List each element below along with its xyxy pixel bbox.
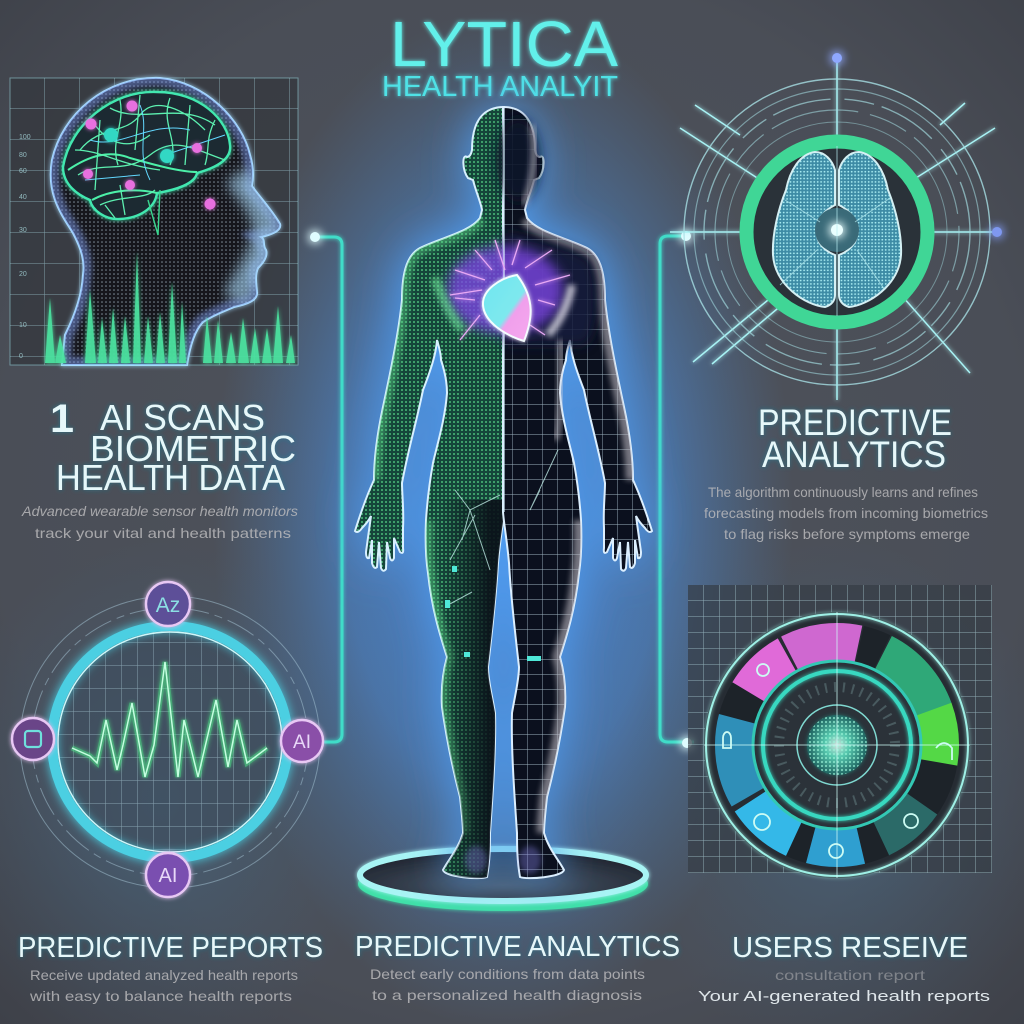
text block: center analytics [355,931,680,1003]
abdominal lines [448,450,558,605]
panel backdrop [10,78,298,365]
monitor fill [54,628,286,856]
axis labels: 100 [19,134,31,141]
center ball [807,715,867,775]
text block: step 1: HEALTH DATA [56,457,285,498]
text block: step 1: track your vital and health patterns [35,525,291,541]
center line [503,108,505,512]
side glow: lower left [0,540,380,1024]
brain [63,92,230,219]
grid [10,78,298,365]
axis labels: 10 [19,322,27,329]
text block: predictive analytics: ANALYTICS [762,434,946,475]
ring fill [747,142,927,322]
ring [52,626,288,858]
green waveform spikes [45,252,295,363]
node: top [146,582,190,626]
inner thin ring [797,705,877,785]
grid backdrop [688,585,992,873]
left leg inner shadow [440,500,505,880]
connector: right [660,231,694,748]
feet highlights [465,846,541,874]
human figure [355,107,652,880]
title [382,8,618,103]
node: top: Az [156,594,180,617]
description: Advanced wearable sensor health monitors [21,503,298,519]
axis labels: 80 [19,152,27,159]
platform underglow [358,857,648,911]
panel: brain scan [10,78,298,365]
cyan nodes [104,128,174,163]
text block: predictive reports [18,932,323,1004]
description: Detect early conditions from data points [370,966,645,982]
central blue glow [213,10,793,1024]
node: bottom: AI [159,865,177,887]
center glow [831,224,843,236]
knee glints [445,566,541,661]
description: consultation report [775,967,925,983]
panel: ECG monitor [12,582,323,897]
side glow: lower right [620,540,1024,1024]
face shading [496,118,540,202]
brain network lines [75,95,225,218]
right torso silver highlight [556,340,561,440]
pink nodes [83,100,216,210]
left half: green mesh [355,107,504,878]
node: left [12,718,54,760]
heart rays [450,240,570,340]
segment icons [723,664,952,858]
heading: AI SCANS [100,397,265,438]
left lung [773,152,835,307]
lobe divider lines [780,146,890,316]
text block: users receive: Your AI-generated health reports [698,988,990,1005]
text block: center analytics: to a personalized health diagnosis [372,987,642,1003]
step number: 1 [50,397,74,441]
upper right torso shading [504,232,597,345]
text block: predictive analytics: forecasting models from incoming biometrics [704,505,988,521]
right lung [839,152,901,307]
left chest highlight [435,278,462,330]
top beacon [832,53,842,63]
subtitle: HEALTH ANALYIT [382,71,618,103]
heading: USERS RESEIVE [732,932,968,964]
outer rim [706,614,968,876]
heading: PREDICTIVE [758,402,952,443]
panel: report dial [688,585,992,888]
description: The algorithm continuously learns and refines [708,484,978,500]
outer halo rings [20,596,320,888]
axis labels: 20 [19,271,27,278]
text block: predictive analytics [704,402,988,542]
text block: predictive reports: with easy to balance health reports [29,988,292,1004]
dial base [704,612,970,878]
heading: PREDICTIVE PEPORTS [18,932,323,964]
segments [694,602,980,888]
axis labels: 60 [19,168,27,175]
node: right [281,720,323,762]
axis labels: 40 [19,194,27,201]
axis labels: 30 [19,227,27,234]
right chest highlight [548,285,572,335]
right beacon [992,227,1002,237]
crosshair [704,612,970,878]
connector: left [310,232,342,742]
head rim and face light [51,78,280,365]
text block: step 1 [21,397,298,541]
inner dashes [779,687,895,803]
heart [483,275,531,341]
waveform [72,662,267,777]
grid [57,631,282,852]
text block: users receive [698,932,990,1005]
brain stem [148,190,160,235]
axis labels [19,134,31,360]
green ring [746,142,928,322]
right half: dark grid [503,107,652,878]
figure far glow [355,107,652,878]
text block: step 1: BIOMETRIC [90,428,296,469]
head profile [51,78,280,365]
platform disc [360,849,646,901]
head dot texture [51,78,280,365]
outer rings [684,79,990,385]
inner dial [753,661,921,829]
heading: PREDICTIVE ANALYTICS [355,931,680,963]
left outer green light [374,218,480,833]
face side light [524,125,534,205]
waveform glow [72,662,267,777]
description: Receive updated analyzed health reports [30,967,298,983]
chest purple glow [447,246,563,334]
panel: lungs scanner [670,53,1002,400]
inner ring [763,671,911,819]
axis labels: 0 [19,353,23,360]
brain cyan lines [85,105,225,180]
title: LYTICA: LYTICA [390,8,618,80]
platform [358,849,648,911]
right outer silver light [527,218,633,833]
text block: predictive analytics: to flag risks before symptoms emerge [724,526,970,542]
brain lower fold [68,154,197,200]
center dots [807,715,867,775]
rays [670,60,998,400]
center hub [815,208,859,252]
node: bottom [146,853,190,897]
grid [688,585,992,873]
node: right: AI [293,732,311,753]
ring inner edge [58,632,282,852]
